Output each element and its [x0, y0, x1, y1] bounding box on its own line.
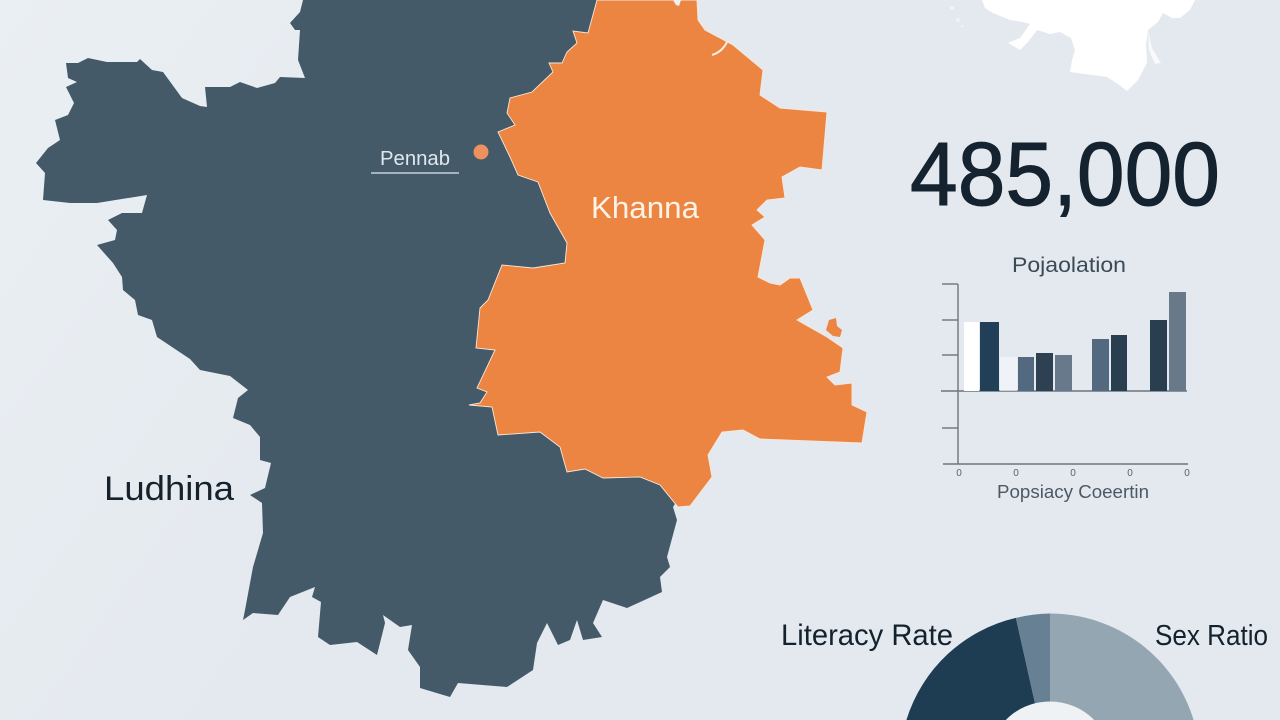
x axis tick labels: 0 [1127, 468, 1133, 479]
x axis tick labels: 0 [956, 468, 962, 479]
marker: Punjab dot [474, 144, 488, 160]
donut chart: literacy rate and sex ratio [906, 614, 1194, 720]
x axis title: Popsiacy Coeertin [997, 482, 1149, 502]
label: Literacy Rate: Literacy Rate [781, 619, 953, 652]
x axis tick labels [956, 468, 1190, 479]
label: Ludhina: Ludhina [104, 470, 234, 508]
label: Punjab callout: Pennab [380, 148, 450, 170]
x axis tick labels: 0 [1184, 468, 1190, 479]
x axis tick labels: 0 [1013, 468, 1019, 479]
big number: population: 485,000 [910, 125, 1220, 225]
map: Khanna region [469, 0, 867, 507]
label: Punjab callout [371, 148, 459, 173]
chart title: Pojaolation [1012, 254, 1126, 277]
bar chart: population [941, 254, 1190, 502]
label: Sex Ratio: Sex Ratio [1155, 620, 1268, 652]
chart bars [964, 292, 1186, 391]
chart axes [941, 284, 1188, 464]
x axis tick labels: 0 [1070, 468, 1076, 479]
label: Khanna: Khanna [591, 190, 700, 225]
white continent silhouette, top right [950, 0, 1195, 91]
map: Ludhiana district [36, 0, 690, 697]
